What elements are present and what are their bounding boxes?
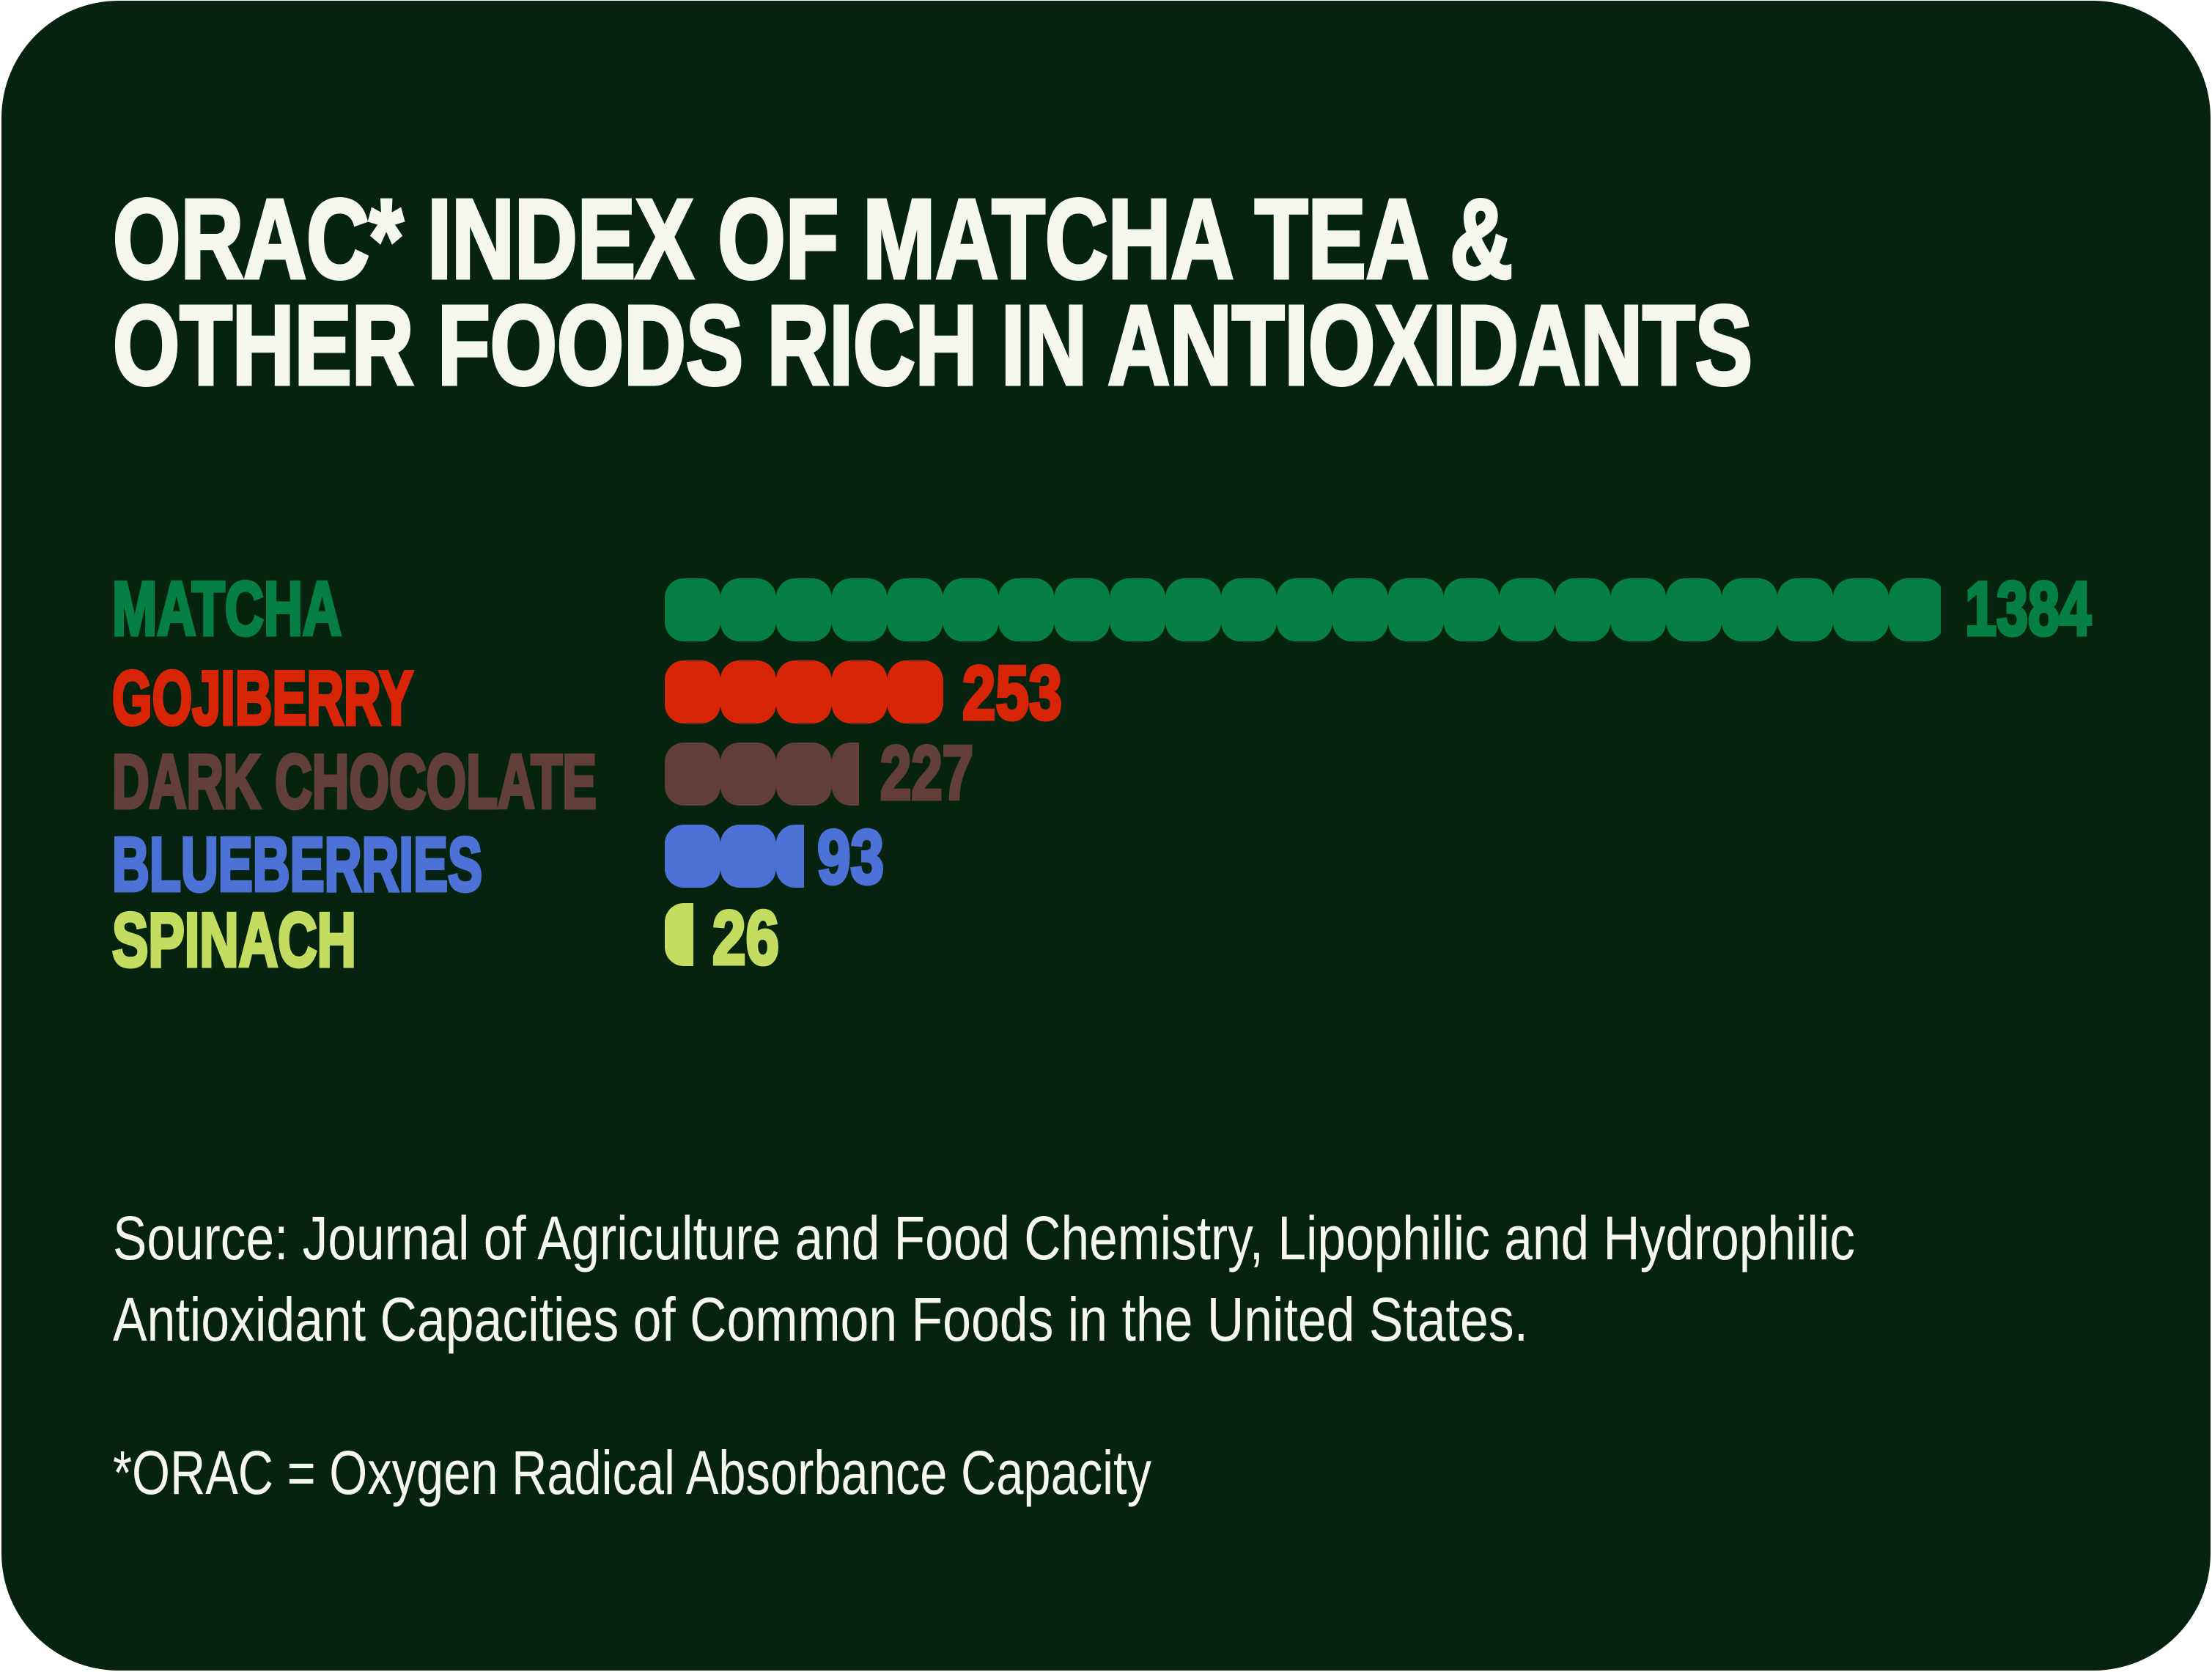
bar chart [112, 567, 2091, 983]
row: gojiberry: 253 [962, 651, 1062, 736]
row: spinach: SPINACH [112, 898, 356, 983]
row: dark chocolate: DARK CHOCOLATE [112, 740, 597, 825]
title [113, 176, 1752, 408]
row: matcha: 1384 [1965, 567, 2091, 652]
row: gojiberry [112, 651, 1062, 741]
row: spinach [112, 896, 779, 983]
row: matcha [112, 567, 2091, 652]
row: blueberries: BLUEBERRIES [112, 822, 482, 907]
source text: Source: Journal of Agriculture and Food Chemistry, Lipophilic and Hydrophilic [113, 1204, 1855, 1273]
row: gojiberry: GOJIBERRY [112, 656, 413, 741]
source text [113, 1204, 1855, 1354]
title: OTHER FOODS RICH IN ANTIOXIDANTS [113, 282, 1752, 408]
row: dark chocolate: 227 [880, 731, 973, 816]
row: spinach: 26 [712, 896, 779, 981]
row: blueberries [112, 815, 884, 907]
title: ORAC* INDEX OF MATCHA TEA & [113, 176, 1513, 302]
footnote: *ORAC = Oxygen Radical Absorbance Capacity [113, 1438, 1151, 1507]
row: matcha: MATCHA [112, 567, 342, 652]
row: blueberries: 93 [817, 815, 884, 900]
source text: Antioxidant Capacities of Common Foods in the United States. [113, 1285, 1528, 1354]
